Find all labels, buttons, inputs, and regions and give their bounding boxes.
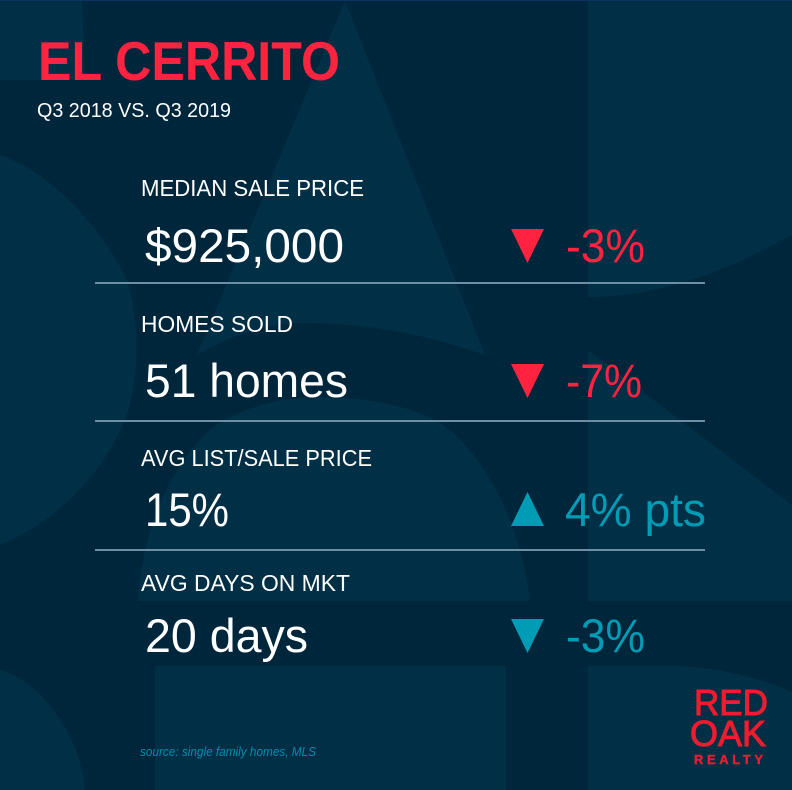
value: $925,000 — [145, 219, 344, 272]
logo: REALTY — [694, 752, 763, 767]
panel: homes sold — [141, 311, 642, 407]
logo: RED — [694, 682, 768, 723]
value: 15% — [145, 483, 229, 536]
label: AVG DAYS ON MKT — [141, 570, 350, 596]
icon: down triangle — [511, 364, 544, 398]
panel: average list to sale price — [141, 445, 706, 536]
icon: up triangle — [511, 492, 544, 526]
icon: down triangle — [511, 229, 544, 263]
change: -3% — [566, 219, 645, 272]
change: -7% — [566, 354, 642, 407]
label: HOMES SOLD — [141, 311, 293, 337]
value: 20 days — [145, 609, 308, 662]
value: 51 homes — [145, 354, 348, 407]
source note: source: single family homes, MLS — [140, 744, 316, 759]
logo: OAK — [690, 713, 766, 754]
panel: average days on market — [141, 570, 645, 662]
change: -3% — [566, 609, 645, 662]
change: 4% pts — [565, 483, 706, 536]
panel: median sale price — [141, 175, 645, 272]
icon: down triangle — [511, 619, 544, 653]
logo — [690, 682, 768, 767]
label: AVG LIST/SALE PRICE — [141, 445, 372, 471]
label: MEDIAN SALE PRICE — [141, 175, 364, 201]
subtitle: Q3 2018 VS. Q3 2019 — [37, 99, 231, 122]
title: EL CERRITO — [38, 30, 340, 92]
